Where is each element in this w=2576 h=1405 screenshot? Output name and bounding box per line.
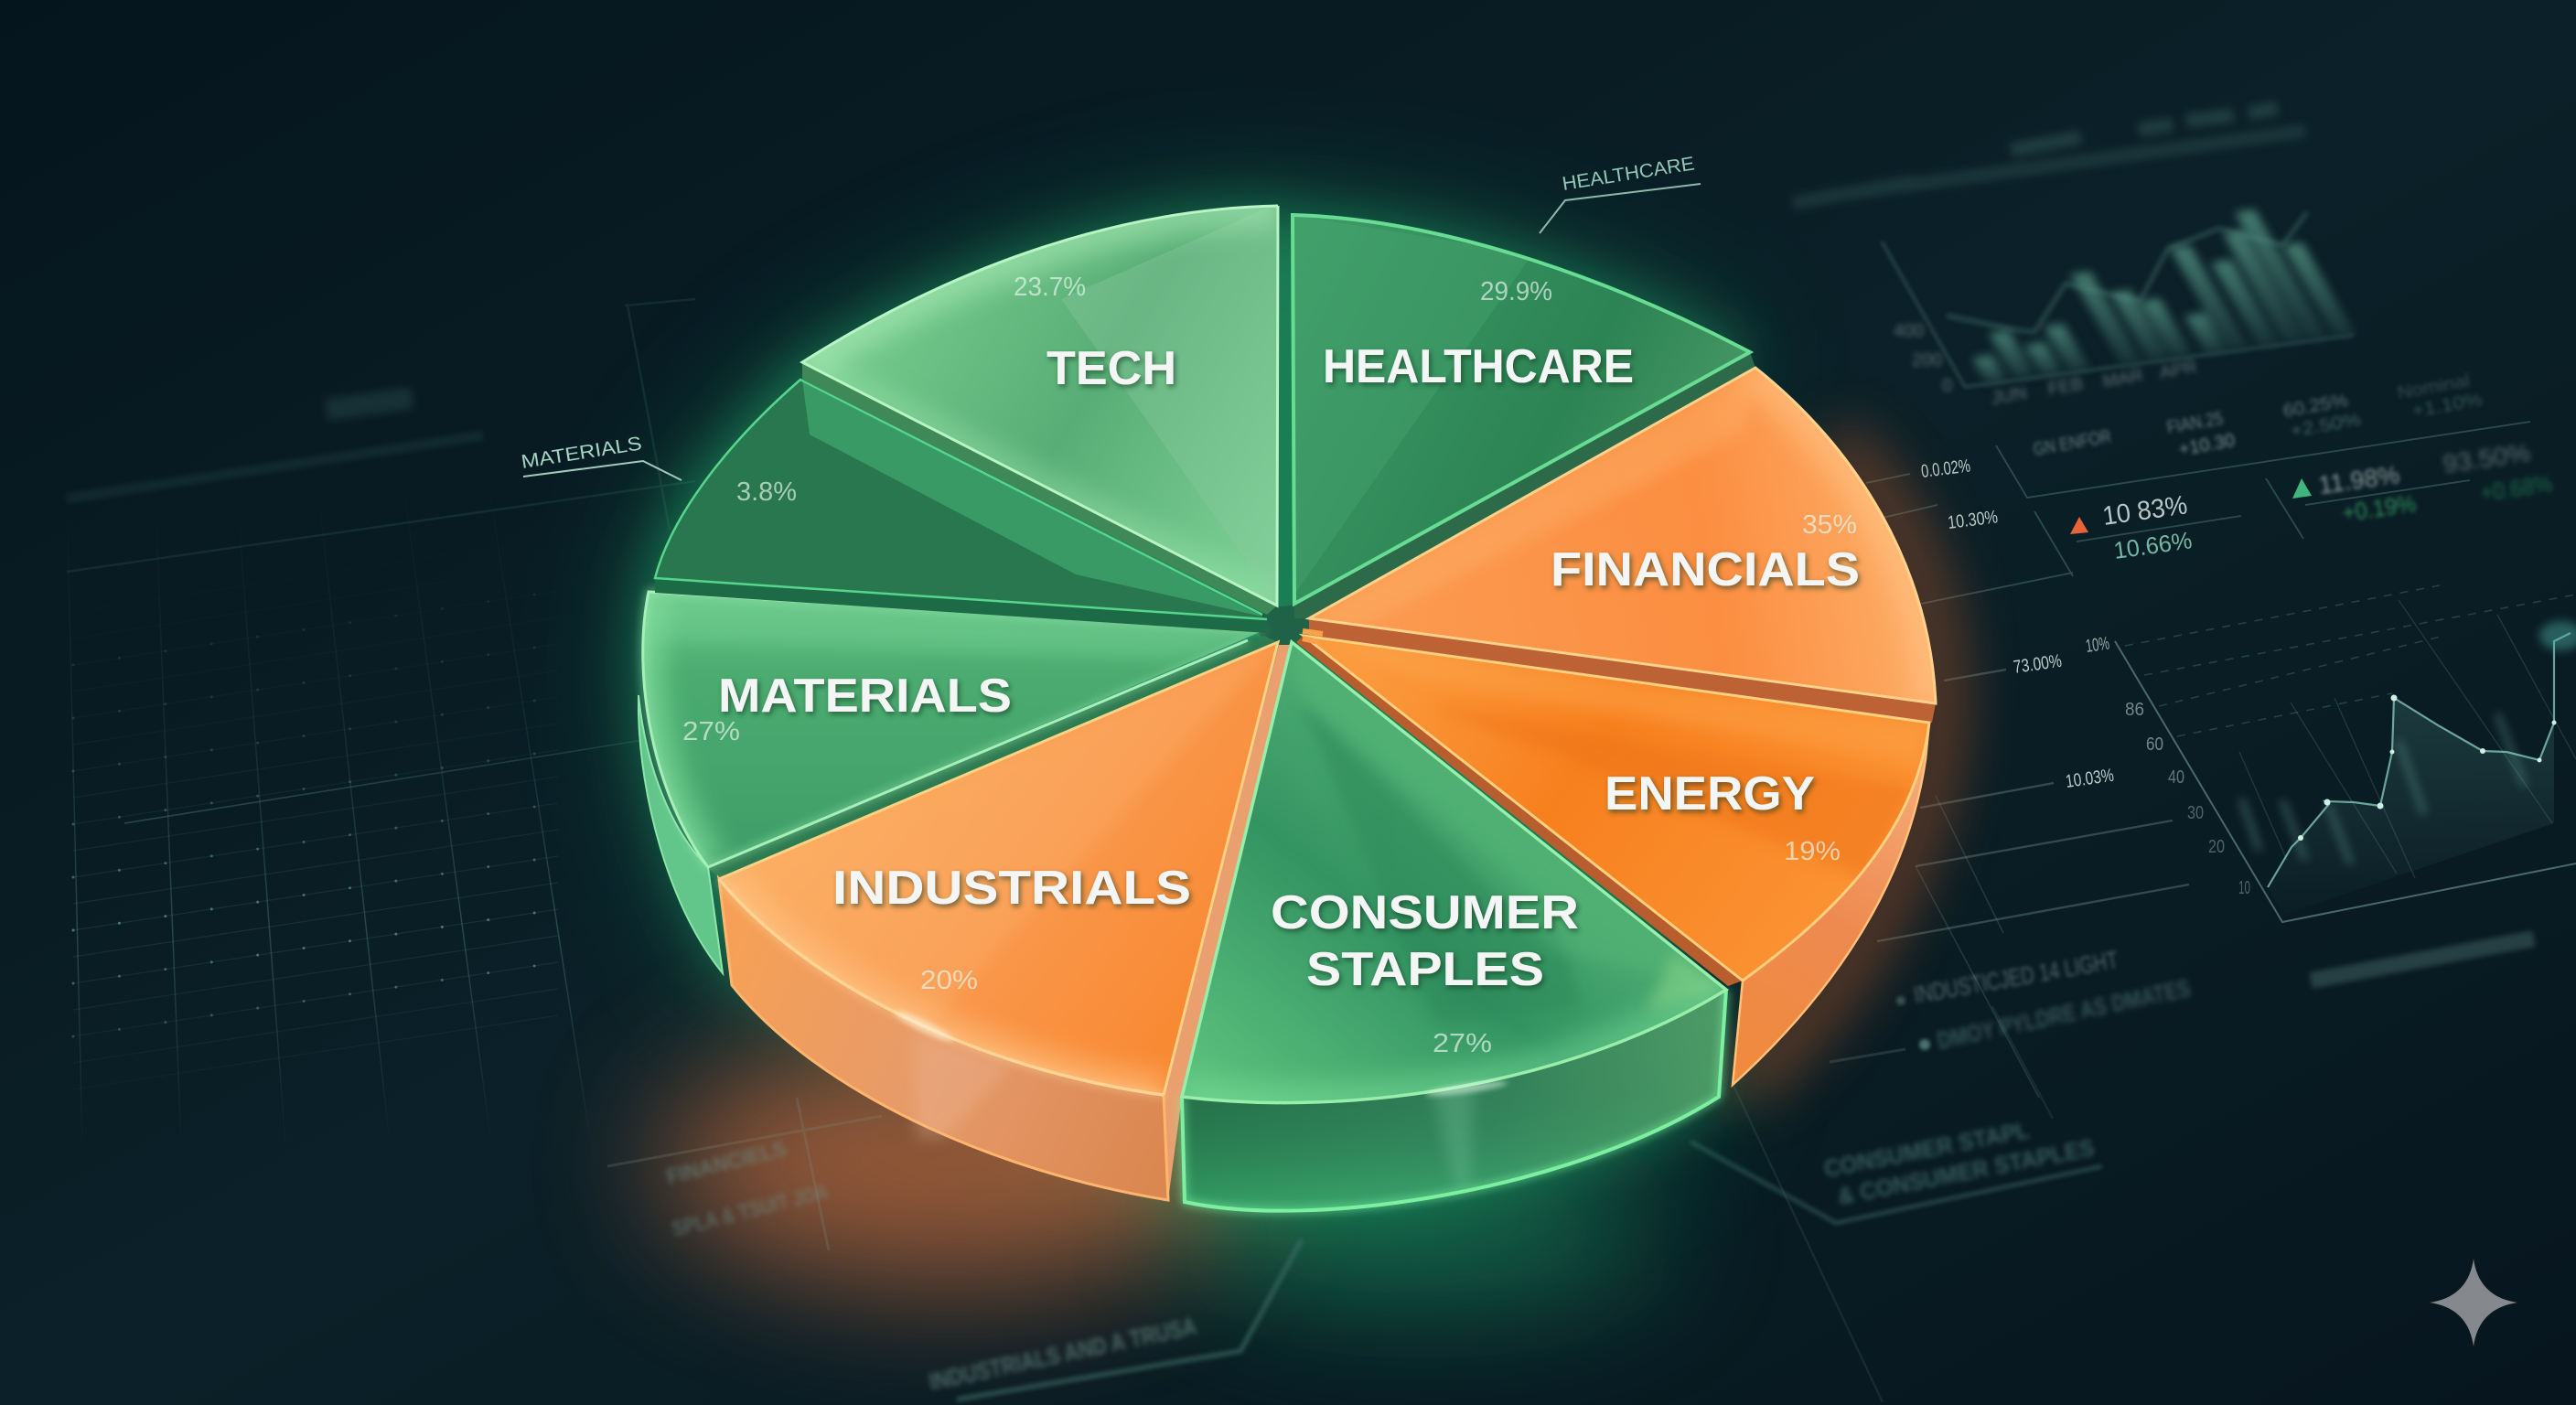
background panel: line chart lower right: 40 (2168, 767, 2184, 788)
background panel: bar and line chart top right: 200 (1912, 350, 1942, 370)
slice: tech (802, 203, 1278, 615)
background panel: line chart lower right: 30 (2187, 803, 2204, 823)
label: tech: TECH (1046, 342, 1176, 395)
peach side strip (1164, 645, 1290, 1200)
percent: healthcare: 29.9% (1480, 277, 1552, 306)
up and down triangle markers (2070, 517, 2088, 534)
slice: industrials (719, 642, 1290, 1200)
background blurred legend: INDUSTICJED 14 LIGHT (1912, 946, 2120, 1009)
background panel: bar and line chart top right: MAR (2101, 366, 2145, 392)
label: financials: FINANCIALS (1551, 543, 1860, 596)
materials top face (643, 592, 1264, 867)
label: healthcare: HEALTHCARE (1323, 340, 1634, 393)
pie glow (639, 206, 1941, 1299)
staples top face (1182, 642, 1726, 1103)
background blurred callouts: financials and industrials: SPLA & TSUIT JOA (670, 1179, 831, 1242)
background panel: market data table: 0.0.02% (1920, 456, 1971, 482)
background panel: market data table: +10.30 (2177, 430, 2237, 460)
orange hub stripes (1303, 631, 1323, 642)
background panel: market data table: 10 83% (2101, 490, 2189, 531)
background blurred callout: consumer staples (1690, 1006, 2102, 1402)
background panel: market data table: 93.50% (2442, 438, 2532, 478)
wide green halo (639, 206, 1750, 1214)
blurred header bars (1793, 108, 2305, 203)
tech wall seen in dark slice (802, 380, 1262, 617)
background blurred callouts: financials and industrials: FINANCIELS (664, 1136, 789, 1190)
industrials top face (719, 642, 1278, 1095)
background panel: line chart lower right: 73.00% (2012, 651, 2063, 678)
background panel: market data table: +2.50% (2289, 410, 2363, 442)
background panel: market data table: FIAN.25 (2165, 408, 2225, 438)
background panel: bar and line chart top right: 400 (1894, 321, 1924, 341)
callout: materials (520, 433, 682, 480)
percent: industrials: 20% (920, 966, 978, 995)
background panel: bar and line chart top right: APR (2158, 357, 2198, 383)
background panel: market data table: +0.68% (2479, 469, 2554, 507)
background panel: line chart lower right: 10.03% (2065, 766, 2115, 792)
callout: healthcare (1540, 153, 1701, 233)
label: consumer staples: CONSUMER (1271, 886, 1579, 939)
central hub (1259, 604, 1314, 648)
slice: energy (1296, 636, 1929, 1085)
background panel: bar and line chart top right: FEB (2046, 374, 2085, 400)
background panel: market data table: GN ENFOR (2032, 426, 2113, 460)
background panel: line chart lower right: 86 (2125, 700, 2144, 720)
background panel: market data table (1848, 370, 2554, 604)
percent: tech: 23.7% (1014, 273, 1086, 302)
background blurred legend: DMOY PYLDRE AS DMATES (1935, 974, 2193, 1055)
energy inner wall (1296, 636, 1743, 986)
label: energy: ENERGY (1605, 767, 1815, 820)
background blurred callouts: financials and industrials (607, 1098, 1302, 1400)
slice: dark green 3.8% (655, 380, 1267, 633)
icon: sparkle watermark (2430, 1259, 2517, 1346)
callout: healthcare: HEALTHCARE (1561, 153, 1696, 195)
label: consumer staples (1271, 886, 1579, 996)
background panel: market data table: Nominal (2396, 370, 2472, 403)
background panel: market data table: 60.25% (2281, 391, 2350, 422)
background blurred callout: consumer staples: CONSUMER STAPL (1821, 1116, 2032, 1183)
background panel: bar and line chart top right (1793, 108, 2356, 409)
background panel: line chart lower right (1877, 585, 2576, 1098)
tight green halo (639, 206, 1750, 1214)
left background blurred header (67, 299, 695, 572)
background panel: market data table: 11.98% (2317, 460, 2401, 499)
background blurred legend (1830, 946, 2193, 1062)
background panel: market data table: 10.30% (1947, 507, 1999, 533)
background blurred callouts: financials and industrials: INDUSTRIALS AND A TRUSA (927, 1313, 1199, 1396)
orange halo under industrials (659, 1038, 1244, 1285)
percent: financials: 35% (1802, 510, 1857, 540)
materials gap wall (708, 636, 1278, 879)
bars (1972, 209, 2356, 384)
background panel: line chart lower right: 10% (2085, 634, 2111, 657)
percent: materials: 27% (682, 717, 740, 746)
energy outer wall (1733, 723, 1929, 1085)
background panel: line chart lower right: 20 (2208, 837, 2225, 857)
area under line (2268, 698, 2554, 915)
callout: materials: MATERIALS (520, 433, 643, 473)
label: industrials: INDUSTRIALS (832, 862, 1191, 915)
background panel: market data table: +1.10% (2410, 390, 2485, 422)
percent: energy: 19% (1784, 837, 1841, 866)
slice: healthcare (1293, 215, 1755, 618)
slice: financials (1309, 368, 1936, 723)
label: consumer staples: STAPLES (1306, 943, 1544, 996)
pie chart (639, 203, 1936, 1211)
background panel: line chart lower right: 60 (2146, 735, 2163, 755)
background panel: bar and line chart top right: 0 (1942, 376, 1952, 396)
slice: consumer staples (1182, 642, 1726, 1211)
background panel: bar and line chart top right: JUN (1990, 383, 2028, 409)
left perspective grid (70, 585, 639, 1105)
energy top face (1304, 636, 1929, 981)
staples front wall (1182, 990, 1726, 1211)
background blurred callout: consumer staples: & CONSUMER STAPLES (1835, 1133, 2097, 1210)
orange halo right (1738, 439, 1941, 1089)
percent: dark green slice: 3.8% (736, 477, 797, 507)
slice: materials (639, 592, 1278, 973)
background panel: market data table: +0.19% (2341, 489, 2418, 527)
industrials wall (719, 879, 1168, 1200)
green halo under staples (1189, 1171, 1665, 1299)
background panel: market data table: 10.66% (2112, 526, 2194, 564)
label: materials: MATERIALS (718, 670, 1012, 723)
background panel: line chart lower right: 10 (2238, 878, 2250, 898)
materials outer wall (639, 695, 723, 973)
percent: consumer staples: 27% (1433, 1029, 1492, 1058)
